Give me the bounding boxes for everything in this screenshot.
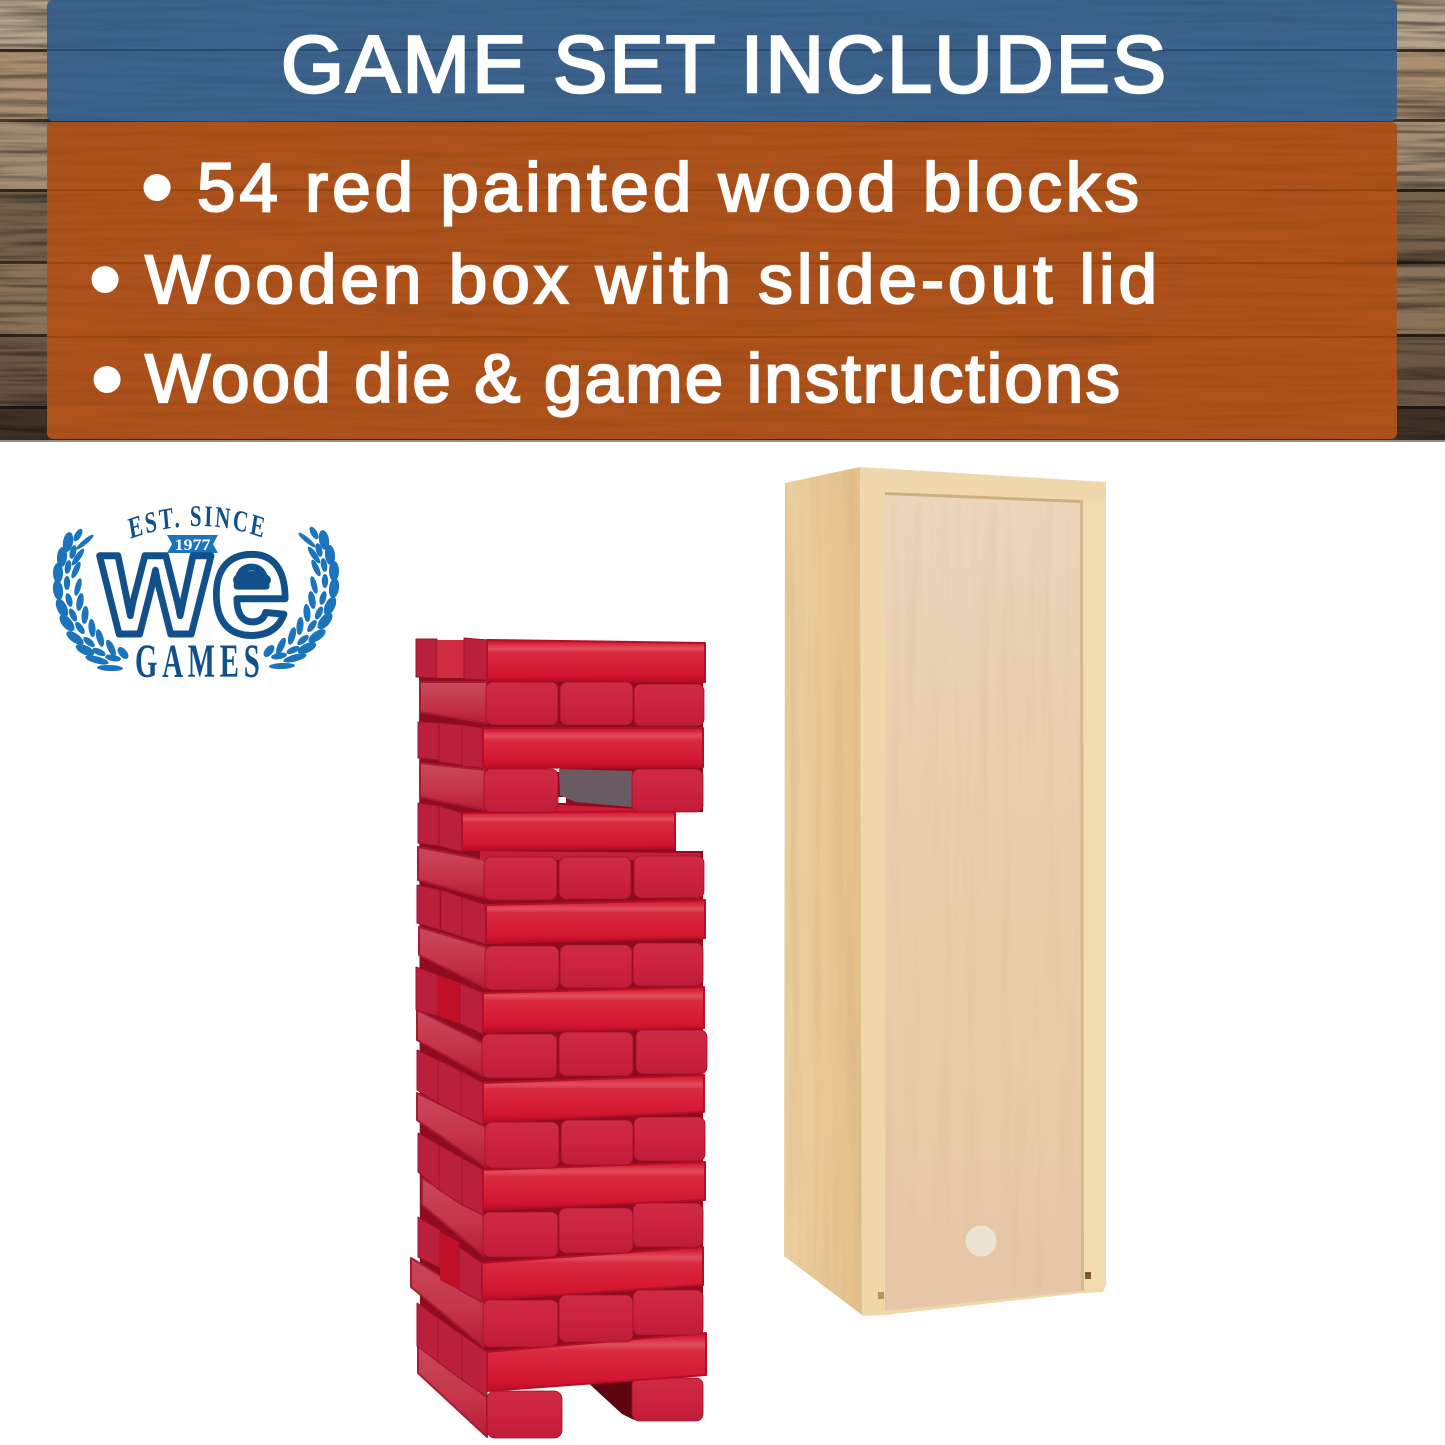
layer 5 — [418, 803, 676, 852]
box side face — [784, 467, 862, 1315]
layer 18 — [418, 1345, 703, 1438]
list item: die and instructions — [90, 325, 1120, 432]
layer 9 — [416, 967, 704, 1034]
layer 15 — [418, 1217, 703, 1302]
box front frame — [860, 467, 1106, 1316]
slide notches — [878, 1292, 884, 1299]
lid grain — [1080, 500, 1084, 1291]
box side grain — [785, 511, 827, 1288]
list item: blocks: 54 red painted wood blocks — [197, 149, 1139, 226]
layer 4 with gap — [420, 763, 703, 812]
pulled block, grey end — [559, 769, 632, 807]
lid panel — [885, 492, 1082, 1311]
layer 13 — [418, 1133, 705, 1215]
list item: blocks: • — [140, 133, 174, 240]
heading: game set includes: GAME SET INCLUDES — [281, 20, 1166, 110]
layer 6 — [418, 847, 704, 900]
logo text: games: GAMES — [135, 635, 265, 688]
background: rustic wood planks strip — [0, 0, 1445, 442]
layer 1 — [416, 638, 705, 682]
icon: right laurel — [261, 525, 340, 669]
layer 14 — [422, 1178, 703, 1257]
layer 17 — [417, 1303, 706, 1397]
list item: die and instructions: • — [90, 325, 124, 432]
list item: box: Wooden box with slide-out lid — [145, 241, 1157, 318]
layer 12 — [417, 1093, 705, 1168]
list item: box — [88, 225, 1157, 332]
logo: WE Games crest — [52, 501, 340, 688]
layer 11 — [417, 1050, 704, 1125]
panel: blue title banner — [47, 0, 1397, 121]
logo wordmark: we: we — [99, 501, 290, 666]
red wood block tower — [411, 638, 707, 1438]
e counter fill — [233, 571, 271, 589]
logo text: est. since: EST. SINCE — [127, 506, 264, 539]
layer 3 — [418, 722, 703, 768]
finger hole — [966, 1226, 996, 1256]
ribbon: 1977 — [167, 535, 218, 554]
panel: orange contents list — [47, 122, 1397, 439]
layer 7 — [417, 885, 705, 944]
layer 8 — [419, 927, 703, 990]
list item: blocks — [140, 133, 1139, 240]
list item: box: • — [88, 225, 122, 332]
layer 10 — [417, 1010, 707, 1078]
list item: die and instructions: Wood die & game instructions — [145, 340, 1120, 417]
tower shadow body — [419, 645, 703, 1391]
layer 16 — [411, 1258, 703, 1347]
ribbon: 1977: 1977 — [174, 537, 210, 554]
icon: left laurel — [52, 527, 131, 671]
wooden box with slide-out lid — [784, 467, 1106, 1317]
layer 2 — [420, 682, 704, 726]
